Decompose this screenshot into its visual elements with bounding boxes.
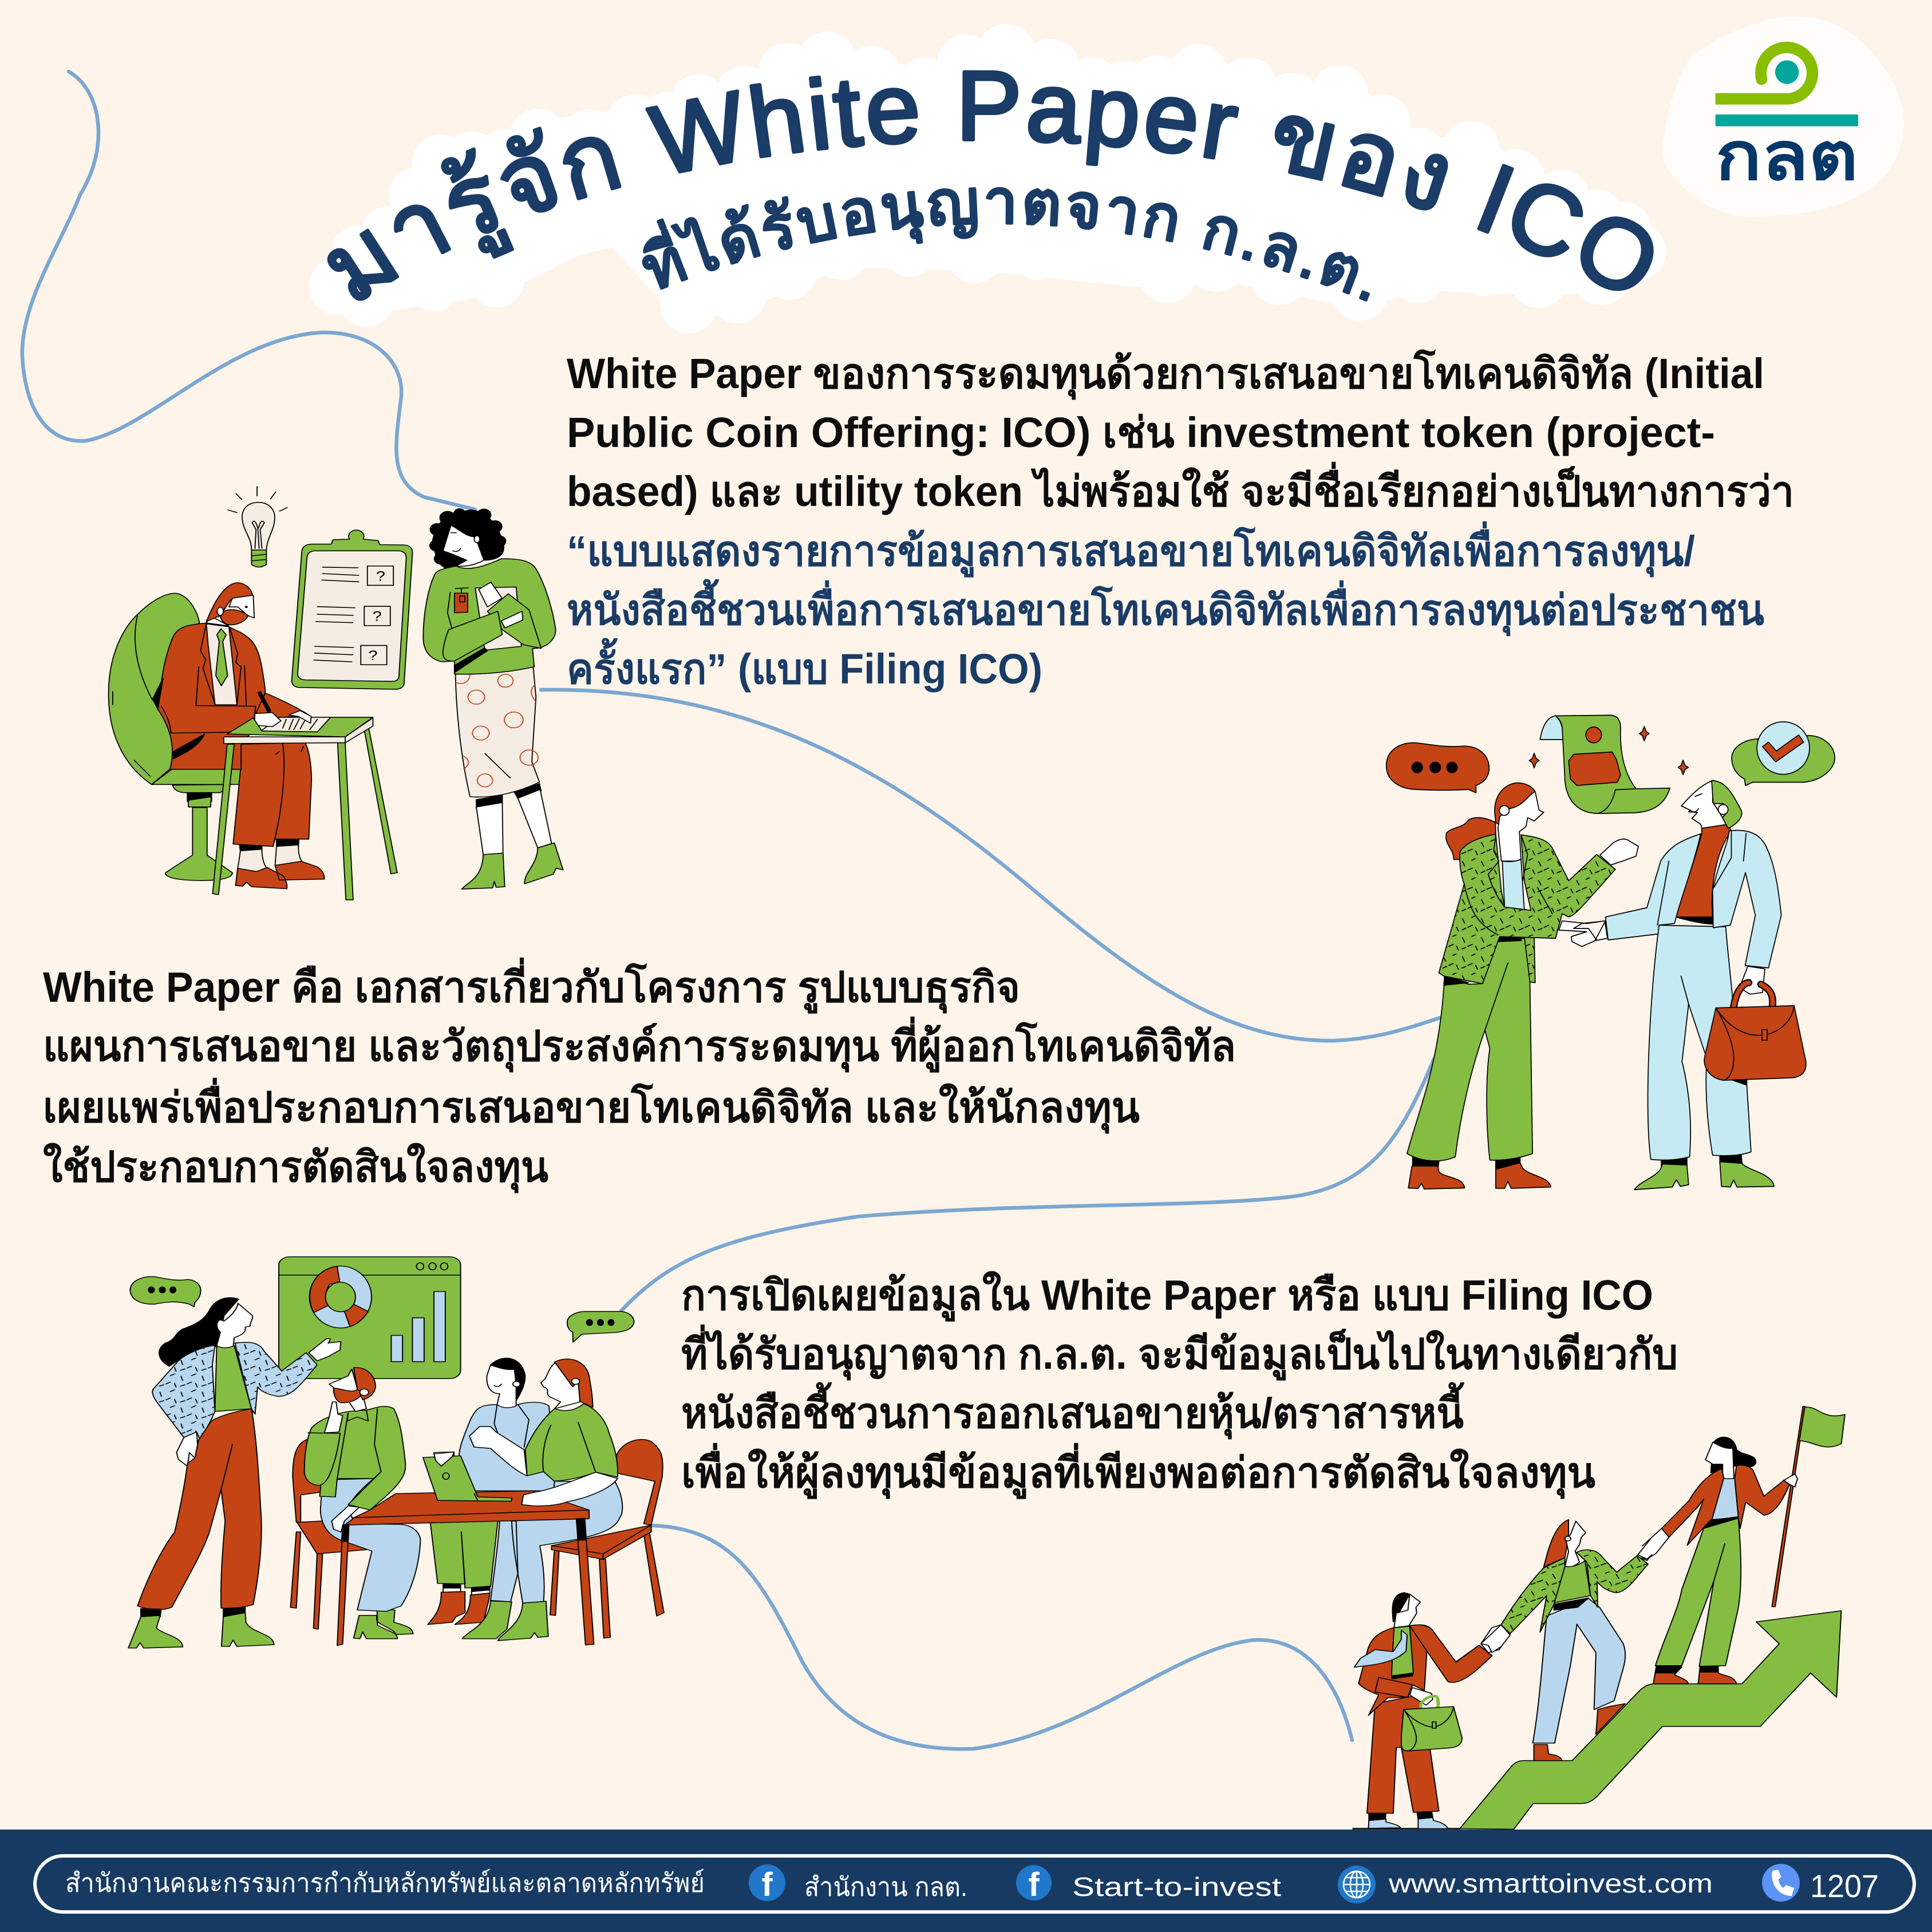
icon: facebook Start-to-invest: f — [1028, 1866, 1040, 1903]
contact pill outline — [35, 1856, 1914, 1912]
woman in green — [1407, 783, 1638, 1189]
main title line: มารู้จัก White Paper ของ ICO — [327, 70, 1654, 301]
text block: White Paper of ICO: ครั้งแรก” (แบบ Filing ICO) — [567, 638, 1042, 693]
desk — [212, 717, 397, 900]
red-haired woman — [462, 1359, 622, 1641]
text block: disclosure — [681, 1270, 1678, 1499]
text block: White Paper of ICO: Public Coin Offering: ICO) เช่น investment token (project- — [567, 409, 1715, 456]
left chair — [290, 1439, 366, 1629]
speech bubble left — [130, 1277, 201, 1307]
laptop and table — [337, 1452, 618, 1646]
logo: SEC Thailand: กลต — [1716, 118, 1858, 193]
icon: clipboard checklist — [292, 530, 413, 689]
icon: light bulb — [228, 487, 287, 567]
organisation name: สำนักงานคณะกรรมการกำกับหลักทรัพย์และตลาดหลักทรัพย์ — [65, 1868, 705, 1898]
hotline number: 1207 — [1810, 1868, 1879, 1904]
text block: disclosure: เพื่อให้ผู้ลงทุนมีข้อมูลที่เพียงพอต่อการตัดสินใจลงทุน — [681, 1443, 1595, 1499]
text block: disclosure: ที่ได้รับอนุญาตจาก ก.ล.ต. จะมีข้อมูลเป็นไปในทางเดียวกับ — [681, 1324, 1678, 1381]
facebook label Start-to-invest: Start-to-invest — [1072, 1872, 1281, 1902]
facebook label SEC: สำนักงาน กลต. — [804, 1872, 967, 1902]
growth arrow — [1353, 1611, 1842, 1830]
chair — [109, 593, 241, 880]
text block: definition: ใช้ประกอบการตัดสินใจลงทุน — [43, 1142, 548, 1194]
text block: White Paper of ICO: “แบบแสดงรายการข้อมูลการเสนอขายโทเคนดิจิทัลเพื่อการลงทุน/ — [567, 521, 1695, 578]
icon: clipboard checklist: ? — [368, 647, 378, 663]
illustration: office worker and colleague — [109, 487, 563, 900]
text block: definition: แผนการเสนอขาย และวัตถุประสงค์การระดมทุน ที่ผู้ออกโทเคนดิจิทัล — [43, 1016, 1236, 1073]
illustration: team climbing growth arrow — [1353, 1406, 1845, 1830]
speech bubble with check mark — [1732, 722, 1835, 785]
connector curves — [22, 72, 1440, 1749]
icon: document scroll — [1529, 715, 1688, 813]
dashboard screen with charts — [279, 1257, 461, 1378]
text block: White Paper of ICO: based) และ utility token ไม่พร้อมใช้ จะมีชื่อเรียกอย่างเป็นทางการว่า — [567, 461, 1794, 515]
handbag — [1704, 966, 1806, 1080]
title — [327, 70, 1654, 302]
text block: disclosure: การเปิดเผยข้อมูลใน White Paper หรือ แบบ Filing ICO — [681, 1270, 1653, 1322]
woman with flag — [1638, 1406, 1845, 1684]
icon: clipboard checklist: ? — [373, 609, 382, 624]
text block: White Paper of ICO: หนังสือชี้ชวนเพื่อการเสนอขายโทเคนดิจิทัลเพื่อการลงทุนต่อประชาชน — [567, 579, 1764, 637]
icon: clipboard checklist: ? — [376, 568, 385, 584]
woman in the middle — [1481, 1520, 1652, 1761]
subtitle line: ที่ได้รับอนุญาตจาก ก.ล.ต. — [642, 187, 1370, 302]
logo: SEC Thailand — [1662, 17, 1904, 216]
woman with polka-dot skirt — [423, 509, 563, 889]
speech bubble right — [567, 1311, 634, 1342]
icon: phone — [1762, 1864, 1800, 1902]
website: www.smarttoinvest.com — [1388, 1868, 1713, 1898]
right chair — [550, 1440, 664, 1638]
speech bubble red — [1386, 743, 1489, 793]
illustration: team meeting — [128, 1257, 664, 1648]
text block: definition: เผยแพร่เพื่อประกอบการเสนอขายโทเคนดิจิทัล และให้นักลงทุน — [43, 1077, 1140, 1134]
text block: disclosure: หนังสือชี้ชวนการออกเสนอขายหุ้น/ตราสารหนี้ — [681, 1382, 1464, 1440]
icon: globe — [1338, 1866, 1376, 1903]
text block: White Paper of ICO — [567, 349, 1794, 693]
red table legs — [428, 1521, 498, 1625]
icon: facebook SEC: f — [761, 1866, 773, 1903]
text block: definition — [43, 957, 1236, 1194]
illustration: two people shaking hands — [1386, 715, 1835, 1190]
presenter woman — [128, 1298, 341, 1648]
seated man and laptop — [434, 1358, 555, 1491]
bearded man — [305, 1368, 420, 1639]
icon: facebook SEC — [749, 1864, 785, 1903]
text block: White Paper of ICO: White Paper ของการระดมทุนด้วยการเสนอขายโทเคนดิจิทัล (Initial — [567, 349, 1764, 400]
man with green bag — [1354, 1593, 1510, 1828]
text block: definition: White Paper คือ เอกสารเกี่ยวกับโครงการ รูปแบบธุรกิจ — [43, 957, 1020, 1014]
footer bar — [0, 1830, 1932, 1932]
woman in light blue — [1559, 780, 1781, 1190]
title cloud backdrop — [309, 24, 1666, 333]
man in red suit — [153, 583, 331, 889]
icon: facebook Start-to-invest — [1016, 1865, 1052, 1903]
